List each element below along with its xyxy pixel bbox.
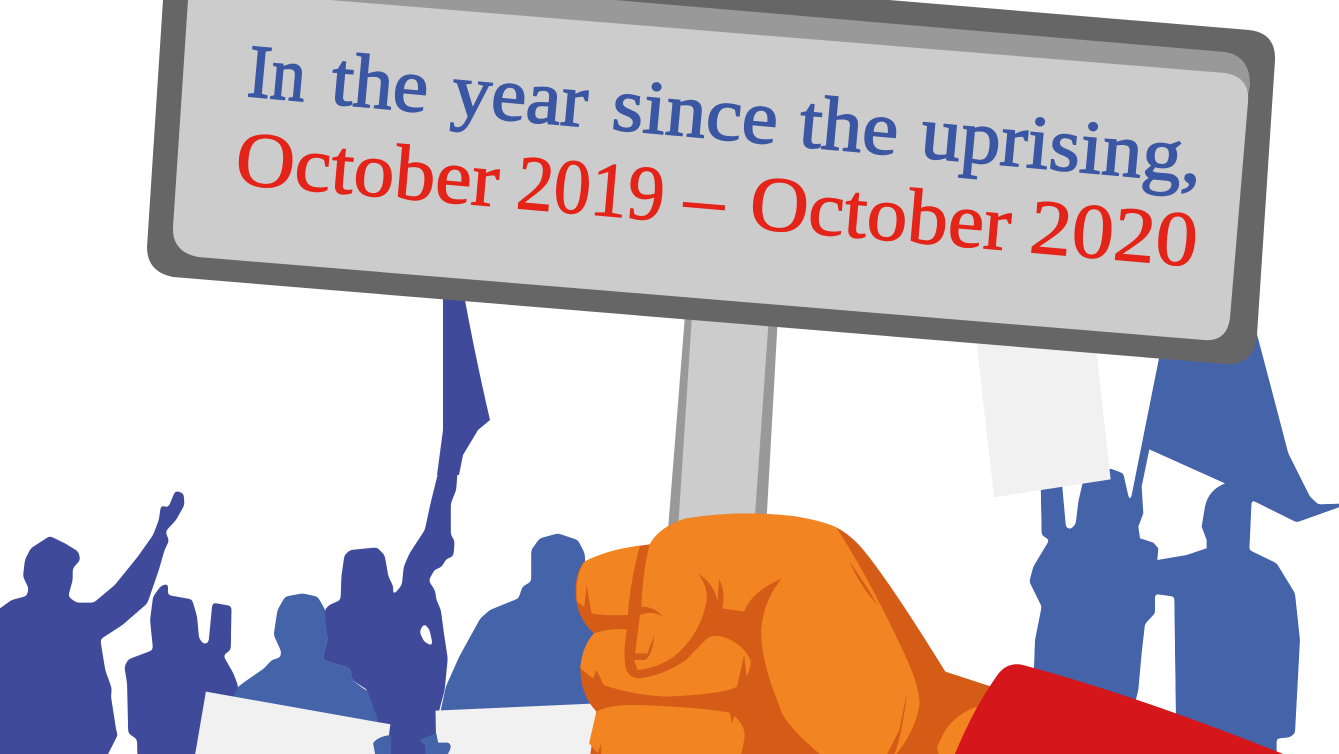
sign title, blue line: since xyxy=(609,62,782,161)
sign title, blue line: the xyxy=(328,37,432,129)
sign title, red line: – xyxy=(680,153,729,243)
back of hand xyxy=(634,513,920,754)
crease marks xyxy=(849,562,908,754)
white placard, left xyxy=(195,692,390,754)
silhouette: person with head and shoulders, light blue xyxy=(191,593,406,754)
sign post xyxy=(668,315,778,530)
crowd: left group xyxy=(0,295,612,754)
left flag xyxy=(437,295,490,475)
sign face xyxy=(173,0,1248,340)
gap between flag and figure xyxy=(1138,449,1225,560)
top finger xyxy=(576,546,640,615)
hands on placard xyxy=(373,733,451,754)
red sleeve xyxy=(951,664,1306,754)
sign title, blue line: uprising, xyxy=(918,91,1206,200)
silhouette: person holding phone xyxy=(124,583,238,754)
sign title, blue line: year xyxy=(449,48,592,144)
silhouettes with right flag xyxy=(1029,327,1339,754)
white placard, centre xyxy=(436,703,600,754)
sign bevel xyxy=(300,0,1250,110)
sign title, blue line: the xyxy=(796,79,902,172)
sign title, red line: October xyxy=(747,158,1015,267)
wrist highlight xyxy=(937,707,977,754)
sign title, red line: October xyxy=(233,114,503,223)
raised fist xyxy=(575,513,1306,754)
sign title, blue line: In xyxy=(244,29,310,118)
sign title, red line: 2019 xyxy=(514,138,668,238)
sign board xyxy=(147,0,1275,364)
middle finger xyxy=(580,629,751,697)
crowd: right group xyxy=(977,327,1339,754)
sign frame xyxy=(147,0,1275,364)
silhouette: person with raised fist xyxy=(0,491,184,754)
silhouette: person raising flag xyxy=(322,450,459,754)
white placard, right xyxy=(977,343,1111,497)
fist base shadow xyxy=(575,513,991,754)
sign title, red line xyxy=(233,114,1201,283)
bottom finger xyxy=(589,705,745,754)
silhouette: person right of the left group, light blue xyxy=(440,533,612,723)
sign title, red line: 2020 xyxy=(1027,182,1201,283)
sign title, blue line xyxy=(244,29,1206,200)
